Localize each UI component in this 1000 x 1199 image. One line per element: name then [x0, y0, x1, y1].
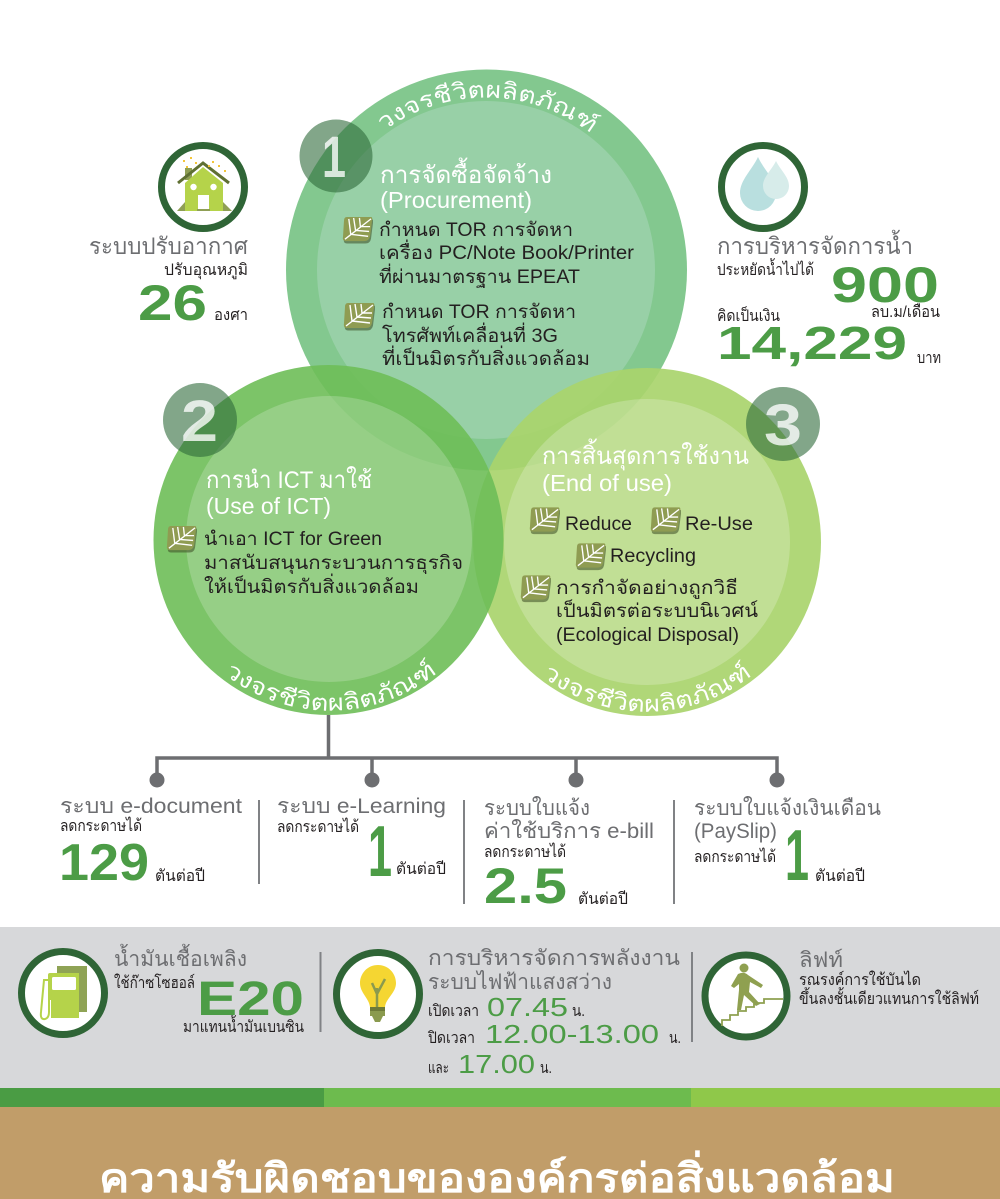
badge: number 1: 1 — [322, 125, 346, 190]
footer panel — [0, 1107, 1000, 1199]
badge: number 2 — [163, 383, 237, 457]
panel: lifecycle circle 3 background — [473, 368, 821, 716]
text block: energy management: การบริหารจัดการพลังงาน — [428, 947, 680, 970]
stat: e-bill: 2.5 — [484, 858, 567, 914]
stat: payslip: ระบบใบแจ้งเงินเดือน — [694, 796, 881, 820]
curved label: circle 2: วงจรชีวิตผลิตภัณฑ์ — [230, 656, 436, 711]
badge: number 2: 2 — [181, 389, 218, 454]
text block: water management: 14,229 — [717, 317, 907, 369]
text block: energy management: ระบบไฟฟ้าแสงสว่าง — [428, 970, 612, 994]
text block: use of ICT: ให้เป็นมิตรกับสิ่งแวดล้อม — [204, 573, 419, 598]
stat: e-document: ลดกระดาษได้ — [60, 816, 142, 835]
text block: procurement — [343, 157, 635, 370]
stat: e-document: ตันต่อปี — [155, 867, 205, 885]
icon: fuel pump — [22, 952, 104, 1034]
badge: number 1 — [300, 120, 372, 192]
text block: procurement: (Procurement) — [380, 187, 532, 213]
stat: payslip: (PaySlip) — [694, 820, 777, 843]
text block: fuel: มาแทนน้ำมันเบนซิน — [183, 1015, 304, 1036]
text block: fuel: ใช้ก๊าซโซฮอล์ — [114, 973, 195, 992]
text block: energy management: และ — [428, 1060, 449, 1077]
icon: person climbing stairs — [705, 955, 787, 1037]
stat: e-bill: ลดกระดาษได้ — [484, 842, 566, 861]
stat: e-bill: ค่าใช้บริการ e-bill — [484, 819, 654, 843]
text block: end of use: Re-Use — [685, 514, 753, 535]
text block: water management: คิดเป็นเงิน — [717, 305, 780, 325]
text block: elevator: ลิฟท์ — [799, 948, 843, 972]
text block: end of use: Recycling — [610, 546, 696, 567]
text block: procurement: ที่ผ่านมาตรฐาน EPEAT — [379, 263, 580, 288]
text block: water management — [717, 230, 941, 369]
text block: energy management: เปิดเวลา — [428, 1003, 479, 1020]
icon: light bulb — [336, 952, 420, 1036]
text block: end of use — [521, 438, 758, 646]
panel: lifecycle circle 1 background — [286, 70, 687, 470]
text block: end of use: เป็นมิตรต่อระบบนิเวศน์ — [556, 598, 758, 622]
text block: water management: บาท — [917, 350, 941, 367]
icon: water drops — [722, 146, 804, 228]
connector tree — [150, 715, 784, 788]
text block: use of ICT — [167, 466, 463, 598]
text block: end of use: Reduce — [565, 514, 632, 535]
stat: e-learning: ตันต่อปี — [396, 860, 446, 878]
text block: procurement: เครื่อง PC/Note Book/Printer — [379, 239, 635, 264]
icon: green house — [162, 146, 244, 228]
text block: air conditioning: องศา — [214, 307, 248, 324]
text block: air conditioning — [89, 233, 248, 331]
stat: e-document: 129 — [59, 834, 149, 892]
stat: e-bill: ระบบใบแจ้ง — [484, 796, 590, 820]
text block: air conditioning: 26 — [138, 275, 207, 331]
stat: e-learning — [277, 795, 446, 892]
text block: use of ICT: มาสนับสนุนกระบวนการธุรกิจ — [204, 553, 463, 575]
stat: e-bill — [484, 796, 654, 914]
text block: end of use: (Ecological Disposal) — [556, 625, 739, 646]
text block: procurement: กำหนด TOR การจัดหา — [382, 302, 576, 323]
text block: air conditioning: ระบบปรับอากาศ — [89, 233, 248, 259]
panel: lifecycle circle 2 background — [154, 365, 504, 715]
stat: e-bill: ตันต่อปี — [578, 890, 628, 908]
text block: water management: 900 — [831, 257, 939, 313]
stat: e-document — [59, 795, 242, 892]
text block: fuel: E20 — [197, 973, 304, 1026]
text block: energy management: 12.00-13.00 — [485, 1019, 659, 1049]
text block: procurement: กำหนด TOR การจัดหา — [379, 220, 573, 241]
text block: use of ICT: (Use of ICT) — [206, 493, 331, 519]
text block: energy management: 07.45 — [487, 992, 568, 1022]
text block: procurement: โทรศัพท์เคลื่อนที่ 3G — [382, 322, 558, 347]
stat: payslip: ลดกระดาษได้ — [694, 847, 776, 866]
text block: elevator: รณรงค์การใช้บันได — [799, 970, 921, 989]
text block: water management: ประหยัดน้ำไปได้ — [717, 258, 814, 279]
text block: water management: การบริหารจัดการน้ำ — [717, 230, 913, 259]
stat: payslip: 1 — [785, 816, 809, 896]
stat: e-learning: 1 — [368, 812, 392, 892]
text block: elevator — [799, 948, 979, 1008]
text block: energy management — [428, 947, 681, 1079]
text block: procurement: การจัดซื้อจัดจ้าง — [380, 157, 552, 189]
text block: fuel — [114, 944, 304, 1036]
curved label: circle 1: วงจรชีวิตผลิตภัณฑ์ — [379, 80, 602, 132]
text block: fuel: น้ำมันเชื้อเพลิง — [114, 944, 247, 971]
text block: elevator: ขึ้นลงชั้นเดียวแทนการใช้ลิฟท์ — [799, 987, 979, 1008]
stat: payslip: ตันต่อปี — [815, 867, 865, 885]
stat: e-learning: ระบบ e-Learning — [277, 795, 446, 818]
panel: grey band — [0, 927, 1000, 1088]
badge: number 3: 3 — [764, 393, 802, 458]
text block: end of use: (End of use) — [542, 470, 672, 496]
text block: end of use: การกำจัดอย่างถูกวิธี — [556, 577, 738, 599]
colour stripe — [0, 1088, 1000, 1107]
text block: procurement: ที่เป็นมิตรกับสิ่งแวดล้อม — [382, 345, 590, 370]
text block: energy management: น. — [540, 1060, 552, 1077]
text block: end of use: การสิ้นสุดการใช้งาน — [542, 438, 749, 471]
text block: use of ICT: การนำ ICT มาใช้ — [206, 466, 372, 494]
text block: energy management: ปิดเวลา — [428, 1030, 475, 1047]
text block: energy management: น. — [669, 1030, 681, 1047]
text block: energy management: 17.00 — [458, 1049, 535, 1079]
text block: energy management: น. — [572, 1003, 585, 1020]
stat: e-learning: ลดกระดาษได้ — [277, 817, 359, 836]
text block: water management: ลบ.ม/เดือน — [871, 303, 940, 321]
text block: air conditioning: ปรับอุณหภูมิ — [164, 262, 248, 280]
curved label: circle 3: วงจรชีวิตผลิตภัณฑ์ — [548, 659, 750, 712]
stat: e-document: ระบบ e-document — [60, 795, 242, 818]
badge: number 3 — [746, 387, 820, 461]
stat: payslip — [694, 796, 881, 896]
text block: use of ICT: นำเอา ICT for Green — [204, 529, 382, 550]
